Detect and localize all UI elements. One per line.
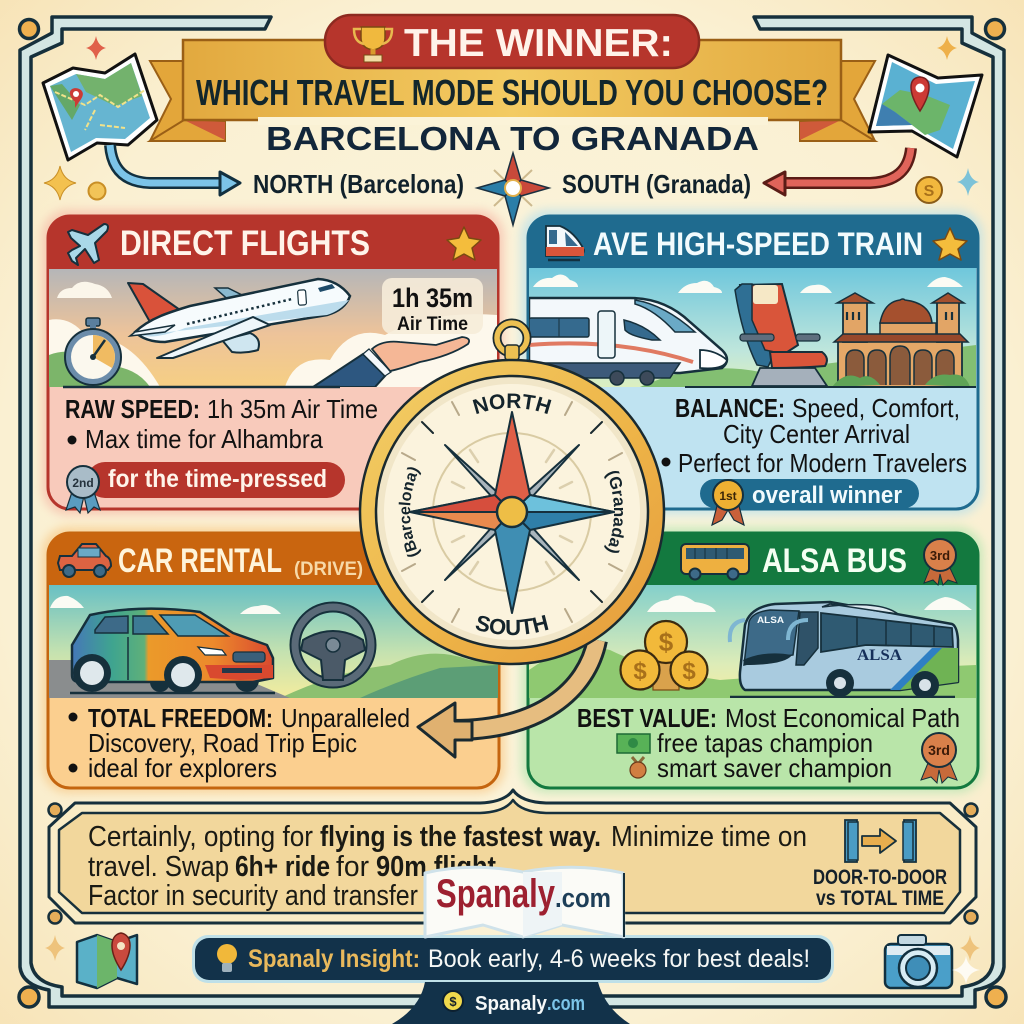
text: total freedom: Unparalleled xyxy=(281,703,410,733)
panel: high-speed train xyxy=(521,210,983,515)
compass label: granada: (Granada) xyxy=(604,471,624,553)
text: flying advice: Factor in security and transfer xyxy=(88,880,418,912)
medal: second place: 2nd xyxy=(72,476,94,490)
train xyxy=(529,298,727,385)
label: door to door xyxy=(813,866,947,910)
panel: car rental xyxy=(42,527,505,793)
icon: small train xyxy=(546,226,584,260)
icon: small medal xyxy=(630,757,646,778)
icon: trophy xyxy=(354,27,392,62)
coins: $ xyxy=(682,658,696,685)
footer tab: .com xyxy=(547,993,585,1015)
text: flying advice: Certainly, opting for xyxy=(88,821,313,853)
icon: door to door xyxy=(845,820,916,862)
coins: $ xyxy=(659,627,674,657)
medal: third in header xyxy=(924,539,957,585)
text: total freedom: TOTAL FREEDOM: xyxy=(88,703,273,733)
heading: route: BARCELONA TO GRANADA xyxy=(266,120,759,157)
icon: folded map xyxy=(77,933,137,988)
coins: $ xyxy=(633,658,647,685)
compass loop xyxy=(497,323,527,360)
text: total freedom xyxy=(68,703,410,783)
panel title: DIRECT FLIGHTS xyxy=(120,224,370,263)
car xyxy=(70,609,275,694)
medal: third place: 3rd xyxy=(928,742,950,758)
compass rose xyxy=(410,412,614,613)
bus: ALSA xyxy=(757,615,785,625)
icon: banknote xyxy=(617,734,650,753)
medal: third place xyxy=(921,733,957,783)
icon: stopwatch xyxy=(65,318,121,385)
panel title: (DRIVE) xyxy=(294,559,363,580)
text: flying advice: Minimize time on xyxy=(611,821,807,853)
compass xyxy=(358,318,666,666)
text: raw speed: RAW SPEED: xyxy=(65,394,200,424)
time label: Air Time xyxy=(397,314,468,335)
label: door to door: DOOR-TO-DOOR xyxy=(813,866,947,889)
winner pill: THE WINNER: xyxy=(404,22,673,65)
medal: first place: 1st xyxy=(719,489,737,503)
text: flying advice: 6h+ ride xyxy=(235,851,330,883)
icon: star xyxy=(447,227,481,260)
insight text xyxy=(248,945,810,973)
text: best value: Most Economical Path xyxy=(725,703,960,733)
label: south: SOUTH (Granada) xyxy=(562,169,751,199)
text: total freedom: Discovery, Road Trip Epic xyxy=(88,728,357,758)
panel title: CAR RENTAL xyxy=(118,542,282,580)
illustration: car scene xyxy=(49,585,498,698)
illustration: bus scene xyxy=(529,585,976,699)
icon: right map xyxy=(869,55,982,157)
text: raw speed xyxy=(65,394,378,454)
footer tab: Spanaly xyxy=(475,993,548,1015)
panel title: AVE HIGH-SPEED TRAIN xyxy=(593,226,923,262)
medal: third in header: 3rd xyxy=(930,548,950,563)
tag: overall winner xyxy=(700,479,919,509)
text: flying advice xyxy=(88,821,807,912)
icon: plane xyxy=(68,224,108,265)
time label xyxy=(382,278,483,335)
compass label: south: SOUTH xyxy=(476,614,548,636)
logo book xyxy=(425,867,624,937)
insight text: Spanaly Insight: xyxy=(248,945,420,973)
coins xyxy=(620,621,708,690)
panel: alsa bus xyxy=(521,527,983,793)
icon: small car xyxy=(58,544,111,577)
illustration: train scene xyxy=(529,268,976,387)
sparkles and coins: S xyxy=(924,183,935,200)
text: total freedom: ideal for explorers xyxy=(88,753,277,783)
illustration: plane scene xyxy=(49,269,497,387)
text: balance: City Center Arrival xyxy=(723,419,910,449)
footer tab xyxy=(392,982,630,1024)
text: best value: BEST VALUE: xyxy=(577,703,717,733)
winner pill xyxy=(325,15,699,68)
steering wheel xyxy=(295,607,371,683)
text: best value xyxy=(577,703,960,783)
medal: second place xyxy=(66,466,100,513)
compass ticks xyxy=(402,402,622,622)
panel: door-to-door note xyxy=(48,790,978,924)
compass label: north: NORTH xyxy=(472,394,552,414)
icon: small bus xyxy=(681,544,749,580)
banner ribbon xyxy=(150,40,875,141)
time label: 1h 35m xyxy=(392,283,473,313)
icon: star xyxy=(933,228,967,260)
text: balance: Perfect for Modern Travelers xyxy=(678,448,967,478)
icon: dollar bulb: $ xyxy=(449,994,457,1009)
text: flying advice: flying is the fastest way. xyxy=(320,821,601,853)
icon: hand and sleeve xyxy=(313,337,469,387)
arrow: north route xyxy=(110,145,240,195)
text: flying advice: travel. Swap xyxy=(88,851,229,883)
bus: ALSA xyxy=(857,647,902,664)
tag: time-pressed: for the time-pressed xyxy=(108,465,327,493)
compass label: barcelona: (Barcelona) xyxy=(398,467,422,557)
text: balance: BALANCE: xyxy=(675,393,785,423)
icon: dollar bulb xyxy=(443,991,463,1011)
arrow: compass tail xyxy=(418,640,597,757)
text: raw speed: Max time for Alhambra xyxy=(85,424,323,454)
insight bar xyxy=(192,935,834,983)
icon: light bulb xyxy=(217,944,237,972)
medal: first place xyxy=(712,480,744,525)
heading: question: WHICH TRAVEL MODE SHOULD YOU CHOOSE? xyxy=(196,72,828,113)
panel: direct flights xyxy=(42,210,504,515)
arrow: south route xyxy=(764,148,911,195)
text: raw speed: 1h 35m Air Time xyxy=(207,394,378,424)
seat xyxy=(735,284,827,386)
icon: left map xyxy=(43,54,157,160)
label: north: NORTH (Barcelona) xyxy=(253,169,464,199)
logo book: Spanaly xyxy=(436,872,556,916)
building xyxy=(832,293,970,387)
bottom icons xyxy=(45,933,980,988)
bus xyxy=(730,602,958,699)
tag: overall winner: overall winner xyxy=(752,482,902,509)
text: best value: smart saver champion xyxy=(657,753,892,783)
text: best value: free tapas champion xyxy=(657,728,873,758)
logo book: .com xyxy=(555,883,611,913)
panel title: ALSA BUS xyxy=(762,542,907,580)
text: balance xyxy=(662,393,967,478)
icon: small compass star xyxy=(477,153,549,225)
insight text: Book early, 4-6 weeks for best deals! xyxy=(428,945,810,973)
sparkles and coins xyxy=(44,36,979,203)
icon: camera xyxy=(885,935,952,988)
text: flying advice: 90m flight xyxy=(376,851,496,883)
text: balance: Speed, Comfort, xyxy=(792,393,960,423)
label: door to door: vs TOTAL TIME xyxy=(816,887,944,910)
text: flying advice: for xyxy=(336,851,369,883)
